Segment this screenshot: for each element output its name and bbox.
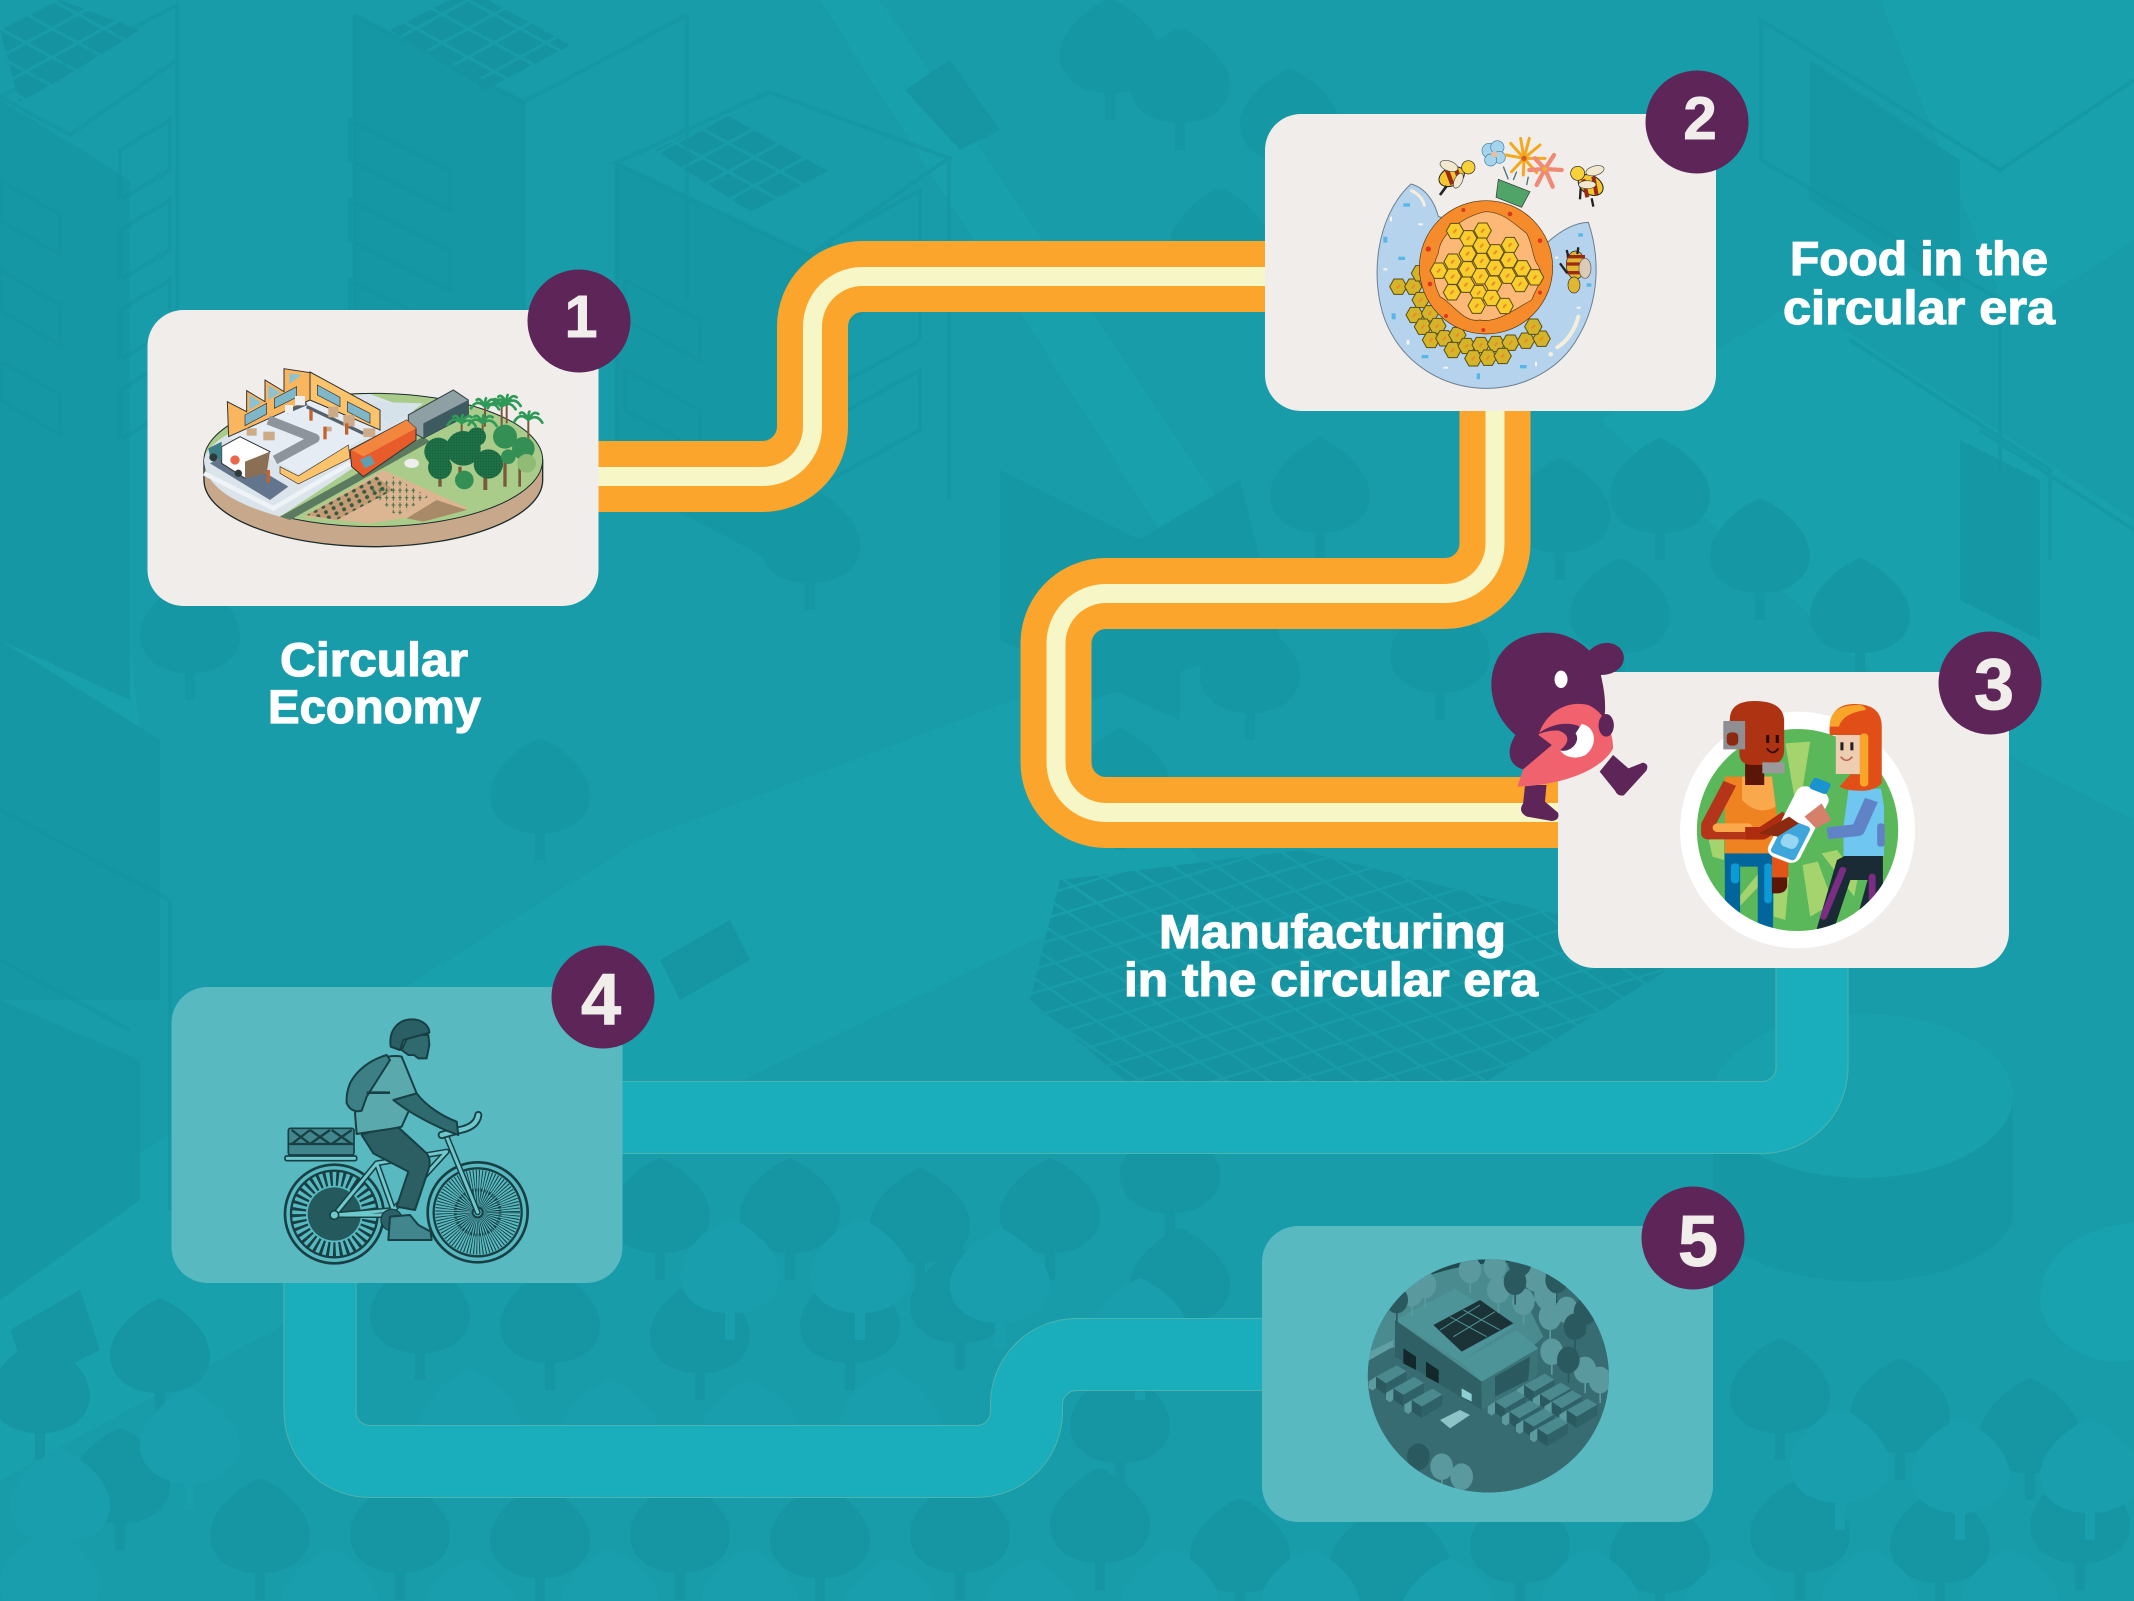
crate on rack [285,1128,357,1161]
forest [438,460,521,490]
panel: card 1 circular economy [148,270,630,606]
background: solar panels [0,0,1700,1085]
vans [1369,1365,1597,1446]
front wheel [428,1162,528,1262]
badge 3 [1938,632,2042,734]
illustration: cyclist with crate [285,1019,528,1263]
fields [303,470,468,523]
background: forest lower layer [0,1118,2130,1601]
flowers [1482,138,1562,187]
badge 1: 1 [565,284,597,350]
label: Circular Economy: Economy [268,680,481,733]
badge 2: 2 [1683,85,1717,152]
illustration: circular economy island [204,369,543,547]
background: upper trees [30,0,1910,860]
background: forest light layer [0,1218,2134,1601]
woman [1816,704,1885,932]
panel: card 3 manufacturing in the circular era [1558,632,2042,968]
badge 3: 3 [1974,645,2014,725]
orange path: card 2 to card 3 [1056,405,1565,812]
label: Food in the circular era [1783,232,2056,334]
label: Manufacturing in the circular era: Manufacturing [1159,905,1506,958]
front low wall [280,445,350,484]
label: Food in the circular era: circular era [1783,281,2056,334]
rear wheel [285,1165,384,1263]
man [1708,701,1788,933]
panel: card 4 cyclist [172,946,654,1283]
label: Manufacturing in the circular era: in the circular era [1124,953,1539,1006]
label: Circular Economy [268,633,481,733]
bee in bowl [1560,247,1591,293]
badge 5: 5 [1678,1202,1718,1282]
badge 1 [528,270,630,372]
label: Circular Economy: Circular [280,633,468,686]
bee top left [1436,158,1475,195]
frame [330,1115,478,1231]
rider [347,1019,458,1240]
illustration: solar warehouse and vans [1368,1259,1609,1492]
bee top right [1571,164,1607,207]
mascot carrying a pink shape [1491,633,1647,821]
background: darker building blocks [0,15,2040,1300]
illustration: two people sharing a bottle [1680,701,1915,948]
building [1395,1288,1538,1410]
factory floor [228,400,380,473]
factory walls [227,369,310,437]
background: storage tanks [1713,1014,2134,1362]
background: building outlines [0,5,2134,1210]
panel: card 2 food in the circular era [1265,70,1748,411]
teal path: card 4 to card 5 [320,1275,1270,1462]
bottle [1765,774,1837,866]
badge 2 [1646,70,1748,174]
badge 4: 4 [581,960,621,1040]
panel: card 5 warehouse [1262,1186,1744,1522]
conveyors [268,420,315,460]
train [408,390,468,438]
orange path: card 1 to card 2 [590,276,1270,476]
badge 4 [552,946,654,1048]
badge 5 [1642,1186,1744,1290]
teal path: card 3 to card 4 [615,960,1812,1118]
label: Food in the circular era: Food in the [1790,232,2048,285]
label: Manufacturing in the circular era [1124,905,1539,1006]
trees [1400,1253,1611,1500]
illustration: honeycomb in orange with bees [1377,138,1607,388]
background: parked vans [10,60,1000,1385]
truck [222,437,270,478]
